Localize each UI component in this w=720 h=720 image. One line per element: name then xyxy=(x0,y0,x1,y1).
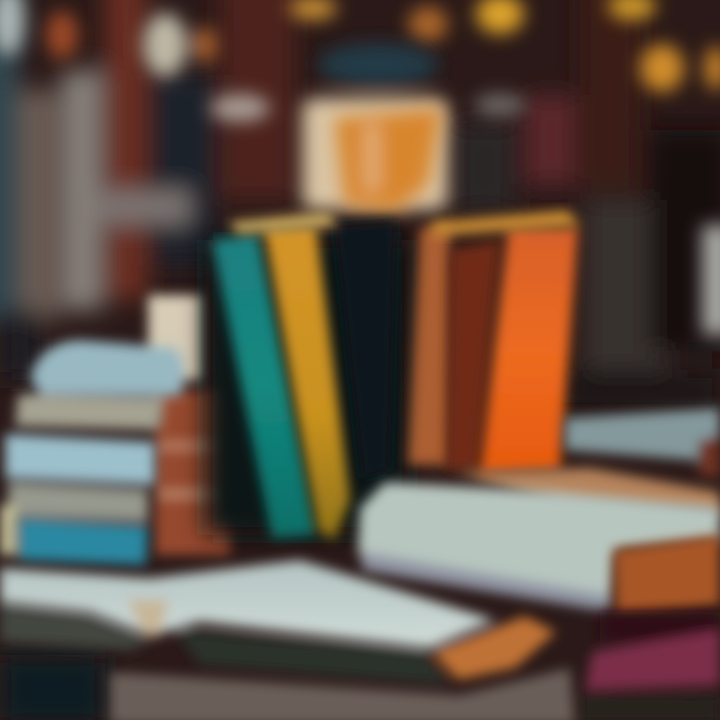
open book on the table xyxy=(0,560,575,720)
background: warm bokeh lights xyxy=(0,0,720,335)
yellow book spine xyxy=(264,226,350,540)
books on the right of the table xyxy=(358,408,720,720)
teal book spine xyxy=(212,234,316,538)
pale blue book stack on the left xyxy=(0,340,184,565)
upright books in the centre xyxy=(205,210,580,540)
mug with dark lid behind the books xyxy=(302,43,448,212)
brown book stack on the left xyxy=(148,295,230,555)
dark green book spine xyxy=(334,220,396,480)
white book stack xyxy=(358,482,720,612)
orange book edge xyxy=(614,535,720,615)
brown book spine xyxy=(408,224,450,465)
golden book tops xyxy=(228,210,580,236)
orange book spine xyxy=(480,228,578,474)
dark red book spine xyxy=(446,240,500,470)
maroon book at bottom right xyxy=(580,612,720,720)
